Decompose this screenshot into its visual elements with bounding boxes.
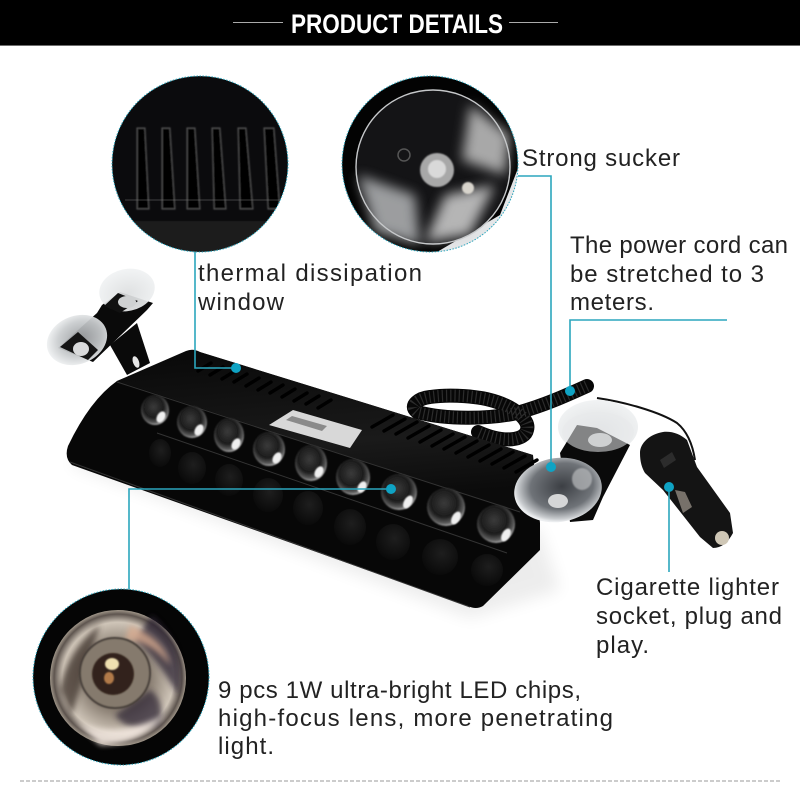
icon: left suction cup mount [39,264,159,375]
icon: right suction cup mount [510,400,638,528]
text: thermal dissipation window: thermal dissipation [198,260,422,287]
detail circle: strong sucker [342,76,525,262]
detail circle outline [112,76,288,252]
top panel [117,350,533,512]
detail circle outline [33,589,209,765]
text: power cord: The power cord can [570,232,788,259]
text: thermal dissipation window [197,260,422,316]
text: LED chips: high-focus lens, more penetrating [218,705,613,732]
title: PRODUCT DETAILS [291,9,503,39]
detail circle: LED lens [33,589,209,765]
callout lines [129,176,727,589]
LED reflections [149,439,503,586]
icon: coiled power cord [414,386,695,460]
text: LED chips [218,677,613,760]
text: cigarette lighter: socket, plug and [596,603,782,630]
detail circle: thermal dissipation window [112,76,288,252]
soft shadow [70,400,560,618]
product: strobe light [39,264,733,618]
text: cigarette lighter [596,574,782,659]
callout dots [231,363,674,494]
header band [0,0,800,46]
text: LED chips: 9 pcs 1W ultra-bright LED chips, [218,677,581,704]
text: power cord [570,232,788,316]
text: power cord: be stretched to 3 [570,261,764,288]
vent slots [198,363,537,472]
text: cigarette lighter: play. [596,632,649,659]
rating label [269,410,362,448]
text: LED chips: light. [218,733,274,760]
text: strong sucker: Strong sucker [522,145,680,172]
detail circle outline [342,76,518,252]
LED lenses [141,395,515,543]
text: cigarette lighter: Cigarette lighter [596,574,779,601]
icon: cigarette lighter plug [640,432,733,548]
text: thermal dissipation window: window [197,289,285,316]
lens highlights [155,410,513,543]
decorative edge lines [70,382,520,607]
text: power cord: meters. [570,289,654,316]
visor body [67,350,540,608]
